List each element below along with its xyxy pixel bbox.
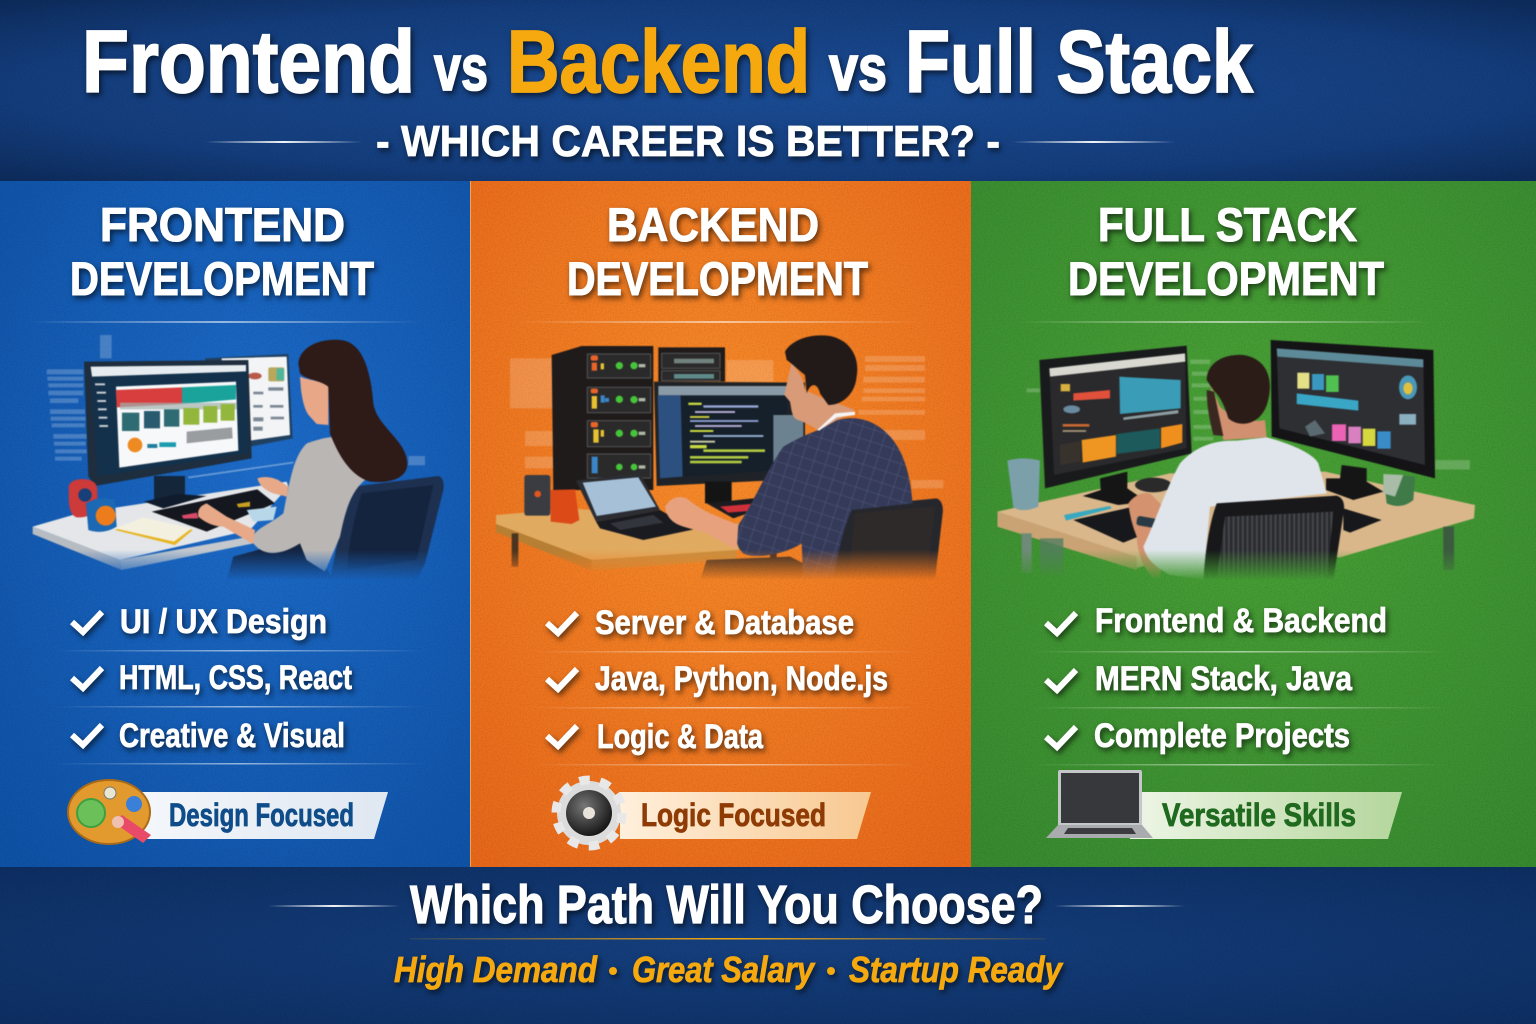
illustration: frontend developer at desk (33, 335, 444, 580)
footer tagline: High Demand (394, 949, 598, 990)
chair (1203, 496, 1344, 580)
desk (496, 508, 805, 571)
left monitor stand (1083, 472, 1147, 505)
title (82, 12, 1254, 111)
checklist: full stack (1030, 602, 1450, 766)
heading: full stack (1068, 198, 1384, 305)
footer question: Which Path Will You Choose? (410, 875, 1043, 935)
skills (72, 603, 352, 755)
right monitor (1271, 340, 1435, 478)
illustration: full stack developer with two monitors (997, 340, 1475, 580)
keyboards (1064, 478, 1382, 543)
server rack (552, 346, 725, 490)
man (1128, 355, 1327, 580)
skills: Frontend & Backend (1095, 602, 1387, 640)
badge: logic focused: Logic Focused (641, 797, 826, 833)
badge: logic focused (556, 780, 871, 846)
heading: frontend (70, 198, 374, 305)
heading: backend: BACKEND (607, 198, 819, 251)
title: Frontend (82, 12, 415, 111)
badge: versatile skills (1046, 770, 1402, 839)
monitor with code (654, 382, 805, 486)
heading: frontend: DEVELOPMENT (70, 252, 374, 305)
right monitor stand (1326, 465, 1383, 500)
title: vs (829, 32, 887, 104)
heading: frontend: FRONTEND (100, 198, 345, 251)
badge: design focused: Design Focused (169, 797, 354, 833)
heading: backend (567, 198, 868, 305)
subtitle: - WHICH CAREER IS BETTER? - (376, 117, 1000, 166)
skills: Creative & Visual (119, 717, 345, 755)
footer tagline: Startup Ready (849, 949, 1064, 990)
footer tagline: Great Salary (632, 949, 816, 990)
skills: Logic & Data (597, 718, 764, 756)
chair (833, 498, 943, 580)
desk (33, 482, 288, 570)
laptop (576, 473, 694, 540)
desk (997, 472, 1475, 575)
mugs (69, 479, 117, 532)
heading: backend: DEVELOPMENT (567, 252, 868, 305)
skills: Server & Database (595, 604, 854, 642)
title: Full Stack (905, 12, 1254, 111)
footer tagline (394, 949, 1064, 990)
title: Backend (507, 12, 810, 111)
skills (1046, 602, 1387, 755)
keyboard (152, 489, 275, 532)
monitor stand (144, 476, 207, 508)
icon: paint palette (68, 780, 151, 844)
skills: UI / UX Design (120, 603, 327, 641)
cup right (1383, 474, 1415, 506)
chair (330, 476, 444, 580)
skills: Complete Projects (1094, 717, 1350, 755)
panel: frontend background (0, 181, 470, 867)
cup left (1007, 458, 1040, 510)
left monitor (1039, 346, 1192, 488)
checklist: backend (530, 604, 920, 766)
badge: design focused (68, 780, 388, 844)
icon: laptop (1046, 770, 1153, 838)
main monitor (84, 360, 252, 486)
skills: HTML, CSS, React (119, 659, 352, 697)
skills (547, 604, 888, 756)
panel: backend background (470, 181, 971, 867)
illustration: backend developer with servers (496, 335, 943, 580)
notebook (115, 517, 193, 545)
woman (198, 340, 407, 572)
header background (0, 0, 1536, 181)
icon: gear (556, 780, 622, 846)
heading: full stack: DEVELOPMENT (1068, 252, 1384, 305)
title: vs (434, 32, 488, 104)
checklist: frontend (55, 603, 425, 764)
skills: Java, Python, Node.js (595, 660, 888, 698)
back monitor (205, 354, 293, 447)
skills: MERN Stack, Java (1095, 660, 1353, 698)
badge: versatile skills: Versatile Skills (1162, 797, 1356, 833)
footer background (0, 867, 1536, 1024)
man (665, 335, 913, 580)
desk items (524, 475, 579, 524)
panel: full stack background (971, 181, 1536, 867)
heading: full stack: FULL STACK (1098, 198, 1357, 251)
